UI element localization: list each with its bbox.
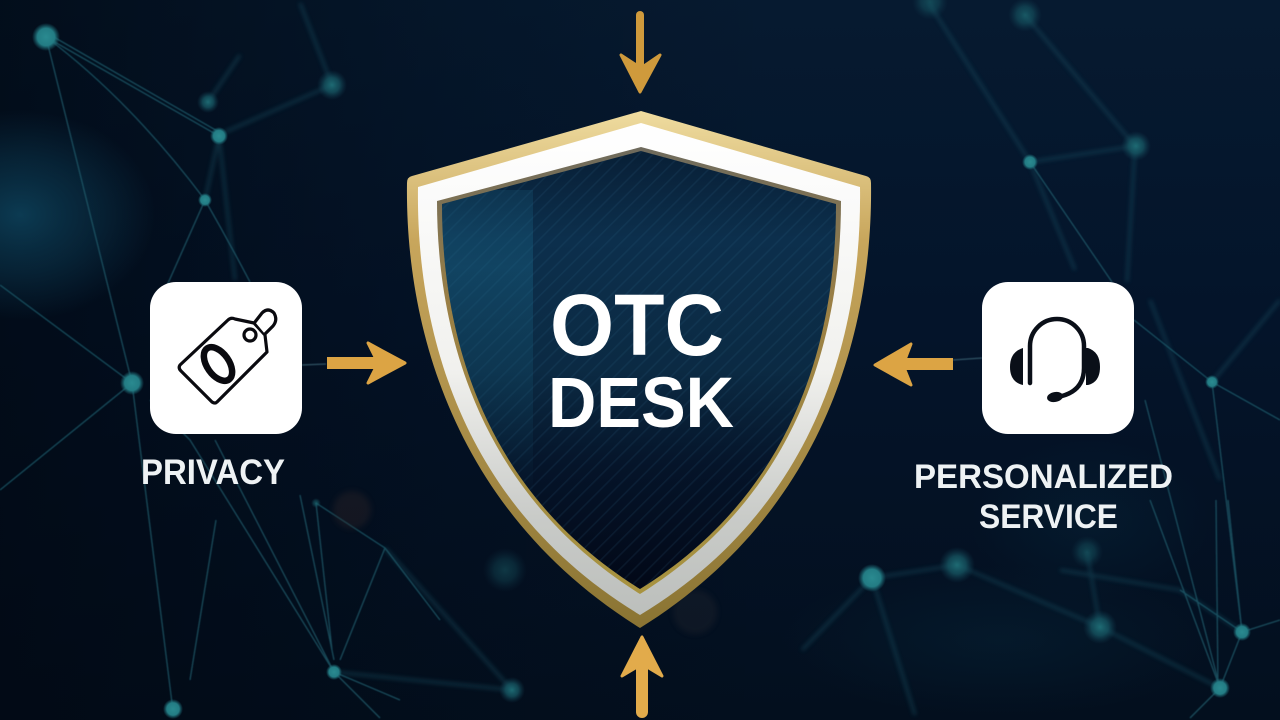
privacy icon tile xyxy=(150,282,302,434)
shield title: DESK xyxy=(548,364,734,443)
shield title xyxy=(548,277,734,443)
shield white band xyxy=(418,123,860,615)
service label: SERVICE xyxy=(979,498,1118,536)
arrow: top xyxy=(621,15,660,92)
privacy label: PRIVACY xyxy=(141,453,285,492)
icon: price tag with zero xyxy=(179,310,276,403)
panel: privacy xyxy=(141,282,302,492)
arrow: bottom xyxy=(622,637,662,712)
service label: PERSONALIZED xyxy=(914,458,1173,496)
shield inner edge xyxy=(437,147,841,594)
service label xyxy=(914,458,1173,536)
arrow: right to shield xyxy=(875,344,953,385)
shield title: OTC xyxy=(550,277,724,374)
panel stripes xyxy=(440,150,840,590)
service icon tile xyxy=(982,282,1134,434)
icon: headset xyxy=(1010,319,1100,403)
shield dark panel xyxy=(442,151,836,589)
arrow: left to shield xyxy=(327,343,405,383)
panel: personalized service xyxy=(914,282,1173,536)
central shield xyxy=(407,111,871,628)
shield gold rim xyxy=(407,111,871,628)
